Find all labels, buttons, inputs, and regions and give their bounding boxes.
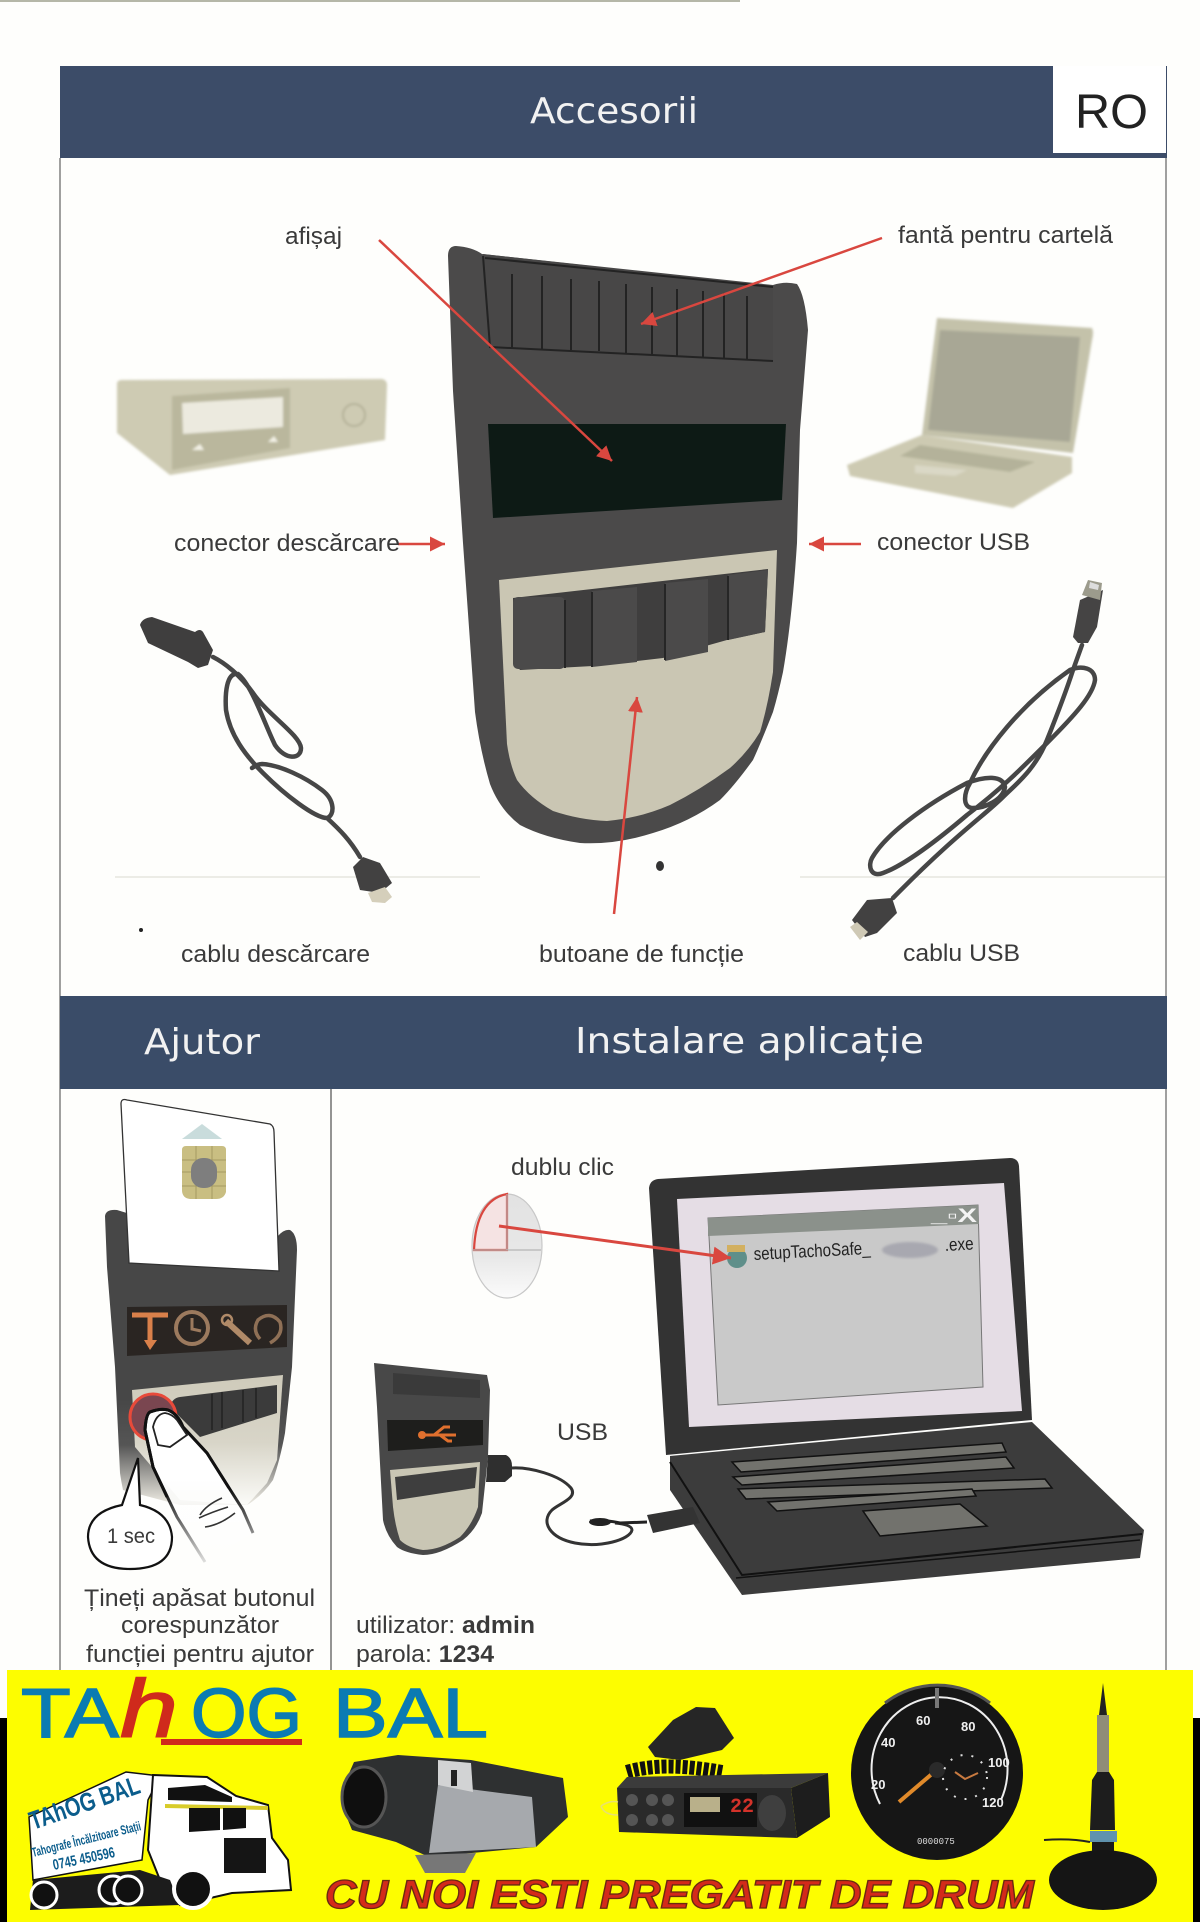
icon: mouse <box>472 1194 542 1298</box>
illustration: speedometer gauge: 60 <box>916 1713 930 1728</box>
illustration: speedometer gauge <box>851 1685 1023 1860</box>
language code RO: RO <box>1075 86 1148 139</box>
card slot ridges <box>483 254 773 361</box>
USB plug <box>647 1507 700 1533</box>
illustration: truck: Tahografe Încălzitoare Stații <box>30 1818 142 1860</box>
function buttons <box>513 569 768 670</box>
logo: TAhOG BAL: OG <box>191 1674 302 1752</box>
section header band: Ajutor / Instalare aplicație <box>60 996 1167 1089</box>
window: _▫X <box>929 1206 977 1227</box>
window <box>708 1205 983 1405</box>
red press highlight <box>130 1394 176 1440</box>
label: butoane de funcție: butoane de funcție <box>539 941 744 968</box>
label: cablu USB: cablu USB <box>903 940 1020 967</box>
keyboard <box>732 1443 1052 1536</box>
illustration: reader connected by USB <box>374 1363 647 1555</box>
illustration: laptop (beige) <box>847 318 1093 508</box>
logo: TAhOG BAL <box>21 1664 488 1755</box>
display <box>488 424 786 518</box>
arrow: fantă pentru cartelă <box>641 238 882 324</box>
screen <box>677 1183 1022 1427</box>
illustration: download cable <box>140 617 392 903</box>
illustration: tachograph unit <box>117 379 387 475</box>
device body <box>105 1210 297 1505</box>
arrow: butoane de funcție <box>614 697 637 914</box>
arrow: afișaj <box>379 240 612 461</box>
logo: TAhOG BAL: TA <box>21 1674 119 1752</box>
text: help instruction <box>84 1585 315 1668</box>
heading: Ajutor: Ajutor <box>144 1022 260 1063</box>
text: login credentials: utilizator: admin <box>356 1612 535 1639</box>
text: help instruction: corespunzător <box>121 1612 279 1639</box>
label: cablu descărcare: cablu descărcare <box>181 941 370 968</box>
file icon <box>727 1248 747 1268</box>
label: conector descărcare: conector descărcare <box>174 530 400 557</box>
illustration: USB cable <box>850 580 1103 940</box>
illustration: laptop with installer <box>647 1158 1144 1595</box>
illustration: speedometer gauge: 0000075 <box>917 1837 955 1847</box>
illustration: parking heater <box>341 1755 568 1873</box>
arrow: double click to file <box>499 1226 731 1258</box>
finger <box>145 1409 253 1562</box>
illustration: speedometer gauge: 40 <box>881 1735 895 1750</box>
illustration: speedometer gauge: 120 <box>982 1795 1004 1810</box>
text: help instruction: funcției pentru ajutor <box>86 1641 314 1668</box>
callout: 1 sec <box>88 1458 172 1569</box>
lid <box>649 1158 1032 1455</box>
arrow: conector descărcare <box>398 543 445 545</box>
display with icons <box>127 1305 287 1356</box>
text: login credentials: parola: 1234 <box>356 1641 495 1668</box>
illustration: CB radio with microphone <box>601 1707 830 1838</box>
light panel with button <box>132 1375 283 1505</box>
illustration: truck <box>25 1770 291 1910</box>
label: dublu clic: dublu clic <box>511 1154 614 1181</box>
illustration: speedometer gauge: 80 <box>961 1719 975 1734</box>
base <box>670 1422 1144 1595</box>
label: fantă pentru cartelă: fantă pentru cartelă <box>898 222 1114 249</box>
callout: 1 sec: 1 sec <box>107 1525 155 1548</box>
text: help instruction: Țineți apăsat butonul <box>84 1585 315 1612</box>
illustration: speedometer gauge: 20 <box>871 1777 885 1792</box>
window: .exe <box>944 1234 974 1255</box>
illustration: CB antenna <box>1044 1683 1157 1910</box>
card <box>121 1100 279 1271</box>
logo: TAhOG BAL: BAL <box>333 1674 488 1752</box>
light button panel <box>499 550 777 821</box>
illustration: main reader device <box>448 246 808 843</box>
USB icon <box>418 1427 456 1441</box>
header: Accesorii <box>60 66 1167 158</box>
channel readout 22: 22 <box>730 1796 754 1819</box>
title: Accesorii: Accesorii <box>530 91 698 132</box>
text: login credentials <box>356 1612 535 1668</box>
label: afișaj: afișaj <box>285 223 342 250</box>
heading: Instalare aplicație: Instalare aplicație <box>575 1021 924 1062</box>
panel: Ajutor illustration <box>88 1100 297 1569</box>
illustration: truck: TAhOG BAL <box>25 1770 144 1836</box>
label: conector USB: conector USB <box>877 529 1030 556</box>
logo: TAhOG BAL: h <box>120 1664 178 1755</box>
black side strips <box>0 1718 1200 1922</box>
arrow: conector USB <box>809 543 861 545</box>
file name: setupTachoSafe_ <box>753 1238 872 1265</box>
slogan: CU NOI ESTI PREGATIT DE DRUM <box>325 1873 1036 1917</box>
illustration: truck: 0745 450596 <box>51 1844 116 1874</box>
panel: yellow advertising banner <box>7 1664 1193 1922</box>
label: USB: USB <box>557 1419 608 1446</box>
illustration: speedometer gauge: 100 <box>988 1755 1010 1770</box>
